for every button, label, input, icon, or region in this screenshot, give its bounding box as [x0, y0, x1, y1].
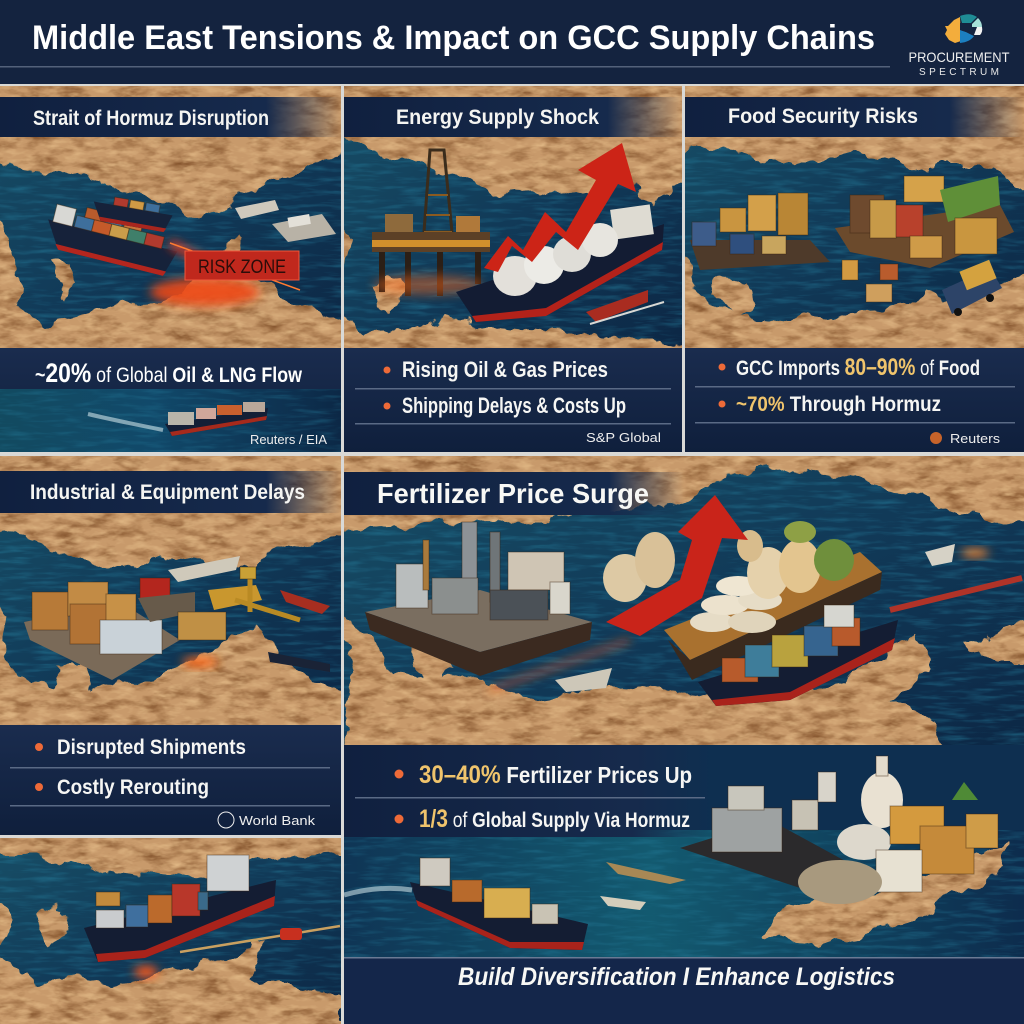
- icon: refinery platform: [365, 522, 630, 690]
- glowing line: [170, 243, 205, 262]
- band: panel heading: Food Security Risks: [728, 105, 918, 128]
- panel footer with stat: ~20% of Global Oil & LNG Flow: [35, 358, 303, 388]
- panel footer: bullets: Rising Oil & Gas Prices: [402, 357, 608, 382]
- icon: small barges: [235, 200, 336, 242]
- source: [930, 431, 1001, 446]
- source: Reuters: [950, 431, 1001, 446]
- icon: small crates: [842, 260, 898, 302]
- panel footer: bullets: [0, 725, 341, 835]
- panel: Fertilizer Price Surge: [330, 440, 1024, 1024]
- stat: fertilizer prices: 30–40% Fertilizer Prices Up: [419, 761, 692, 789]
- arrow: rising prices: [484, 143, 636, 272]
- logo: Procurement Spectrum: [908, 14, 1010, 78]
- band: panel heading: [0, 97, 341, 137]
- band: panel heading: Strait of Hormuz Disruption: [33, 107, 269, 130]
- source: World Bank: [239, 813, 316, 828]
- panel footer: bullets: ~70% Through Hormuz: [736, 393, 941, 416]
- band: panel heading: Industrial & Equipment Delays: [30, 481, 305, 504]
- panel: bottom left ship map: [0, 838, 341, 1024]
- panel: Food Security Risks: [670, 70, 1024, 452]
- icon: LNG tanker: [456, 204, 664, 322]
- source: [218, 812, 316, 828]
- icon: ship, front: [48, 204, 177, 276]
- icon: ship, rear: [94, 196, 172, 232]
- band: panel heading: [344, 97, 682, 137]
- panel footer: bullets: GCC Imports 80–90% of Food: [736, 354, 980, 381]
- panel footer with stat: [0, 348, 341, 452]
- panel footer: bullets: Costly Rerouting: [57, 776, 209, 799]
- logo: Procurement Spectrum: PROCUREMENT: [908, 49, 1010, 65]
- icon: small boats: [600, 862, 686, 910]
- band: panel heading: [344, 472, 684, 515]
- title: Middle East Tensions & Impact on GCC Supply Chains: [32, 19, 875, 57]
- panel lower area: [344, 745, 1024, 1024]
- bottom call-to-action band: Build Diversification I Enhance Logistics: [458, 963, 895, 991]
- icon: cranes and equipment: [138, 567, 300, 640]
- source: S&P Global: [586, 430, 661, 445]
- icon: cargo truck: [942, 260, 1002, 316]
- logo: Procurement Spectrum: SPECTRUM: [919, 67, 999, 78]
- panel footer: bullets: Disrupted Shipments: [57, 736, 246, 759]
- callout: risk zone: RISK ZONE: [198, 257, 286, 278]
- icon: sand island with goods: [680, 756, 1005, 947]
- icon: small tanker: [586, 290, 664, 324]
- band: panel heading: [685, 97, 1024, 137]
- icon: small ships: [168, 556, 330, 672]
- icon: sacks on barge: [603, 521, 882, 680]
- panel: Energy Supply Shock: [344, 86, 682, 452]
- panel footer: bullets: Shipping Delays & Costs Up: [402, 393, 626, 418]
- arrow: price surge: [606, 495, 748, 636]
- header bar: [0, 0, 1024, 84]
- icon: oil platform: [372, 150, 490, 296]
- icon: ship in footer: [88, 402, 268, 436]
- band: panel heading: [0, 471, 341, 513]
- pipeline: [134, 926, 340, 978]
- panel: Strait of Hormuz Disruption: [0, 70, 360, 452]
- panel: Industrial & Equipment Delays: [0, 440, 360, 835]
- band: panel heading: Energy Supply Shock: [396, 106, 599, 129]
- panel footer: bullets: [685, 348, 1024, 452]
- band: panel heading: Fertilizer Price Surge: [377, 478, 649, 509]
- source: Reuters / EIA: [250, 432, 327, 447]
- icon: container ship, lower: [344, 858, 588, 950]
- icon: container ship: [84, 855, 276, 962]
- icon: container ship: [698, 605, 898, 706]
- bottom call-to-action band: [344, 957, 1024, 1024]
- icon: crates on dock: [690, 193, 830, 270]
- icon: produce barge: [835, 176, 1014, 268]
- panel footer: bullets: [344, 348, 682, 452]
- stat: global supply: 1/3 of Global Supply Via Hormuz: [419, 805, 690, 833]
- icon: small boats and pipeline: [555, 544, 1022, 692]
- callout: risk zone: [185, 251, 299, 280]
- icon: cargo barge: [24, 582, 180, 680]
